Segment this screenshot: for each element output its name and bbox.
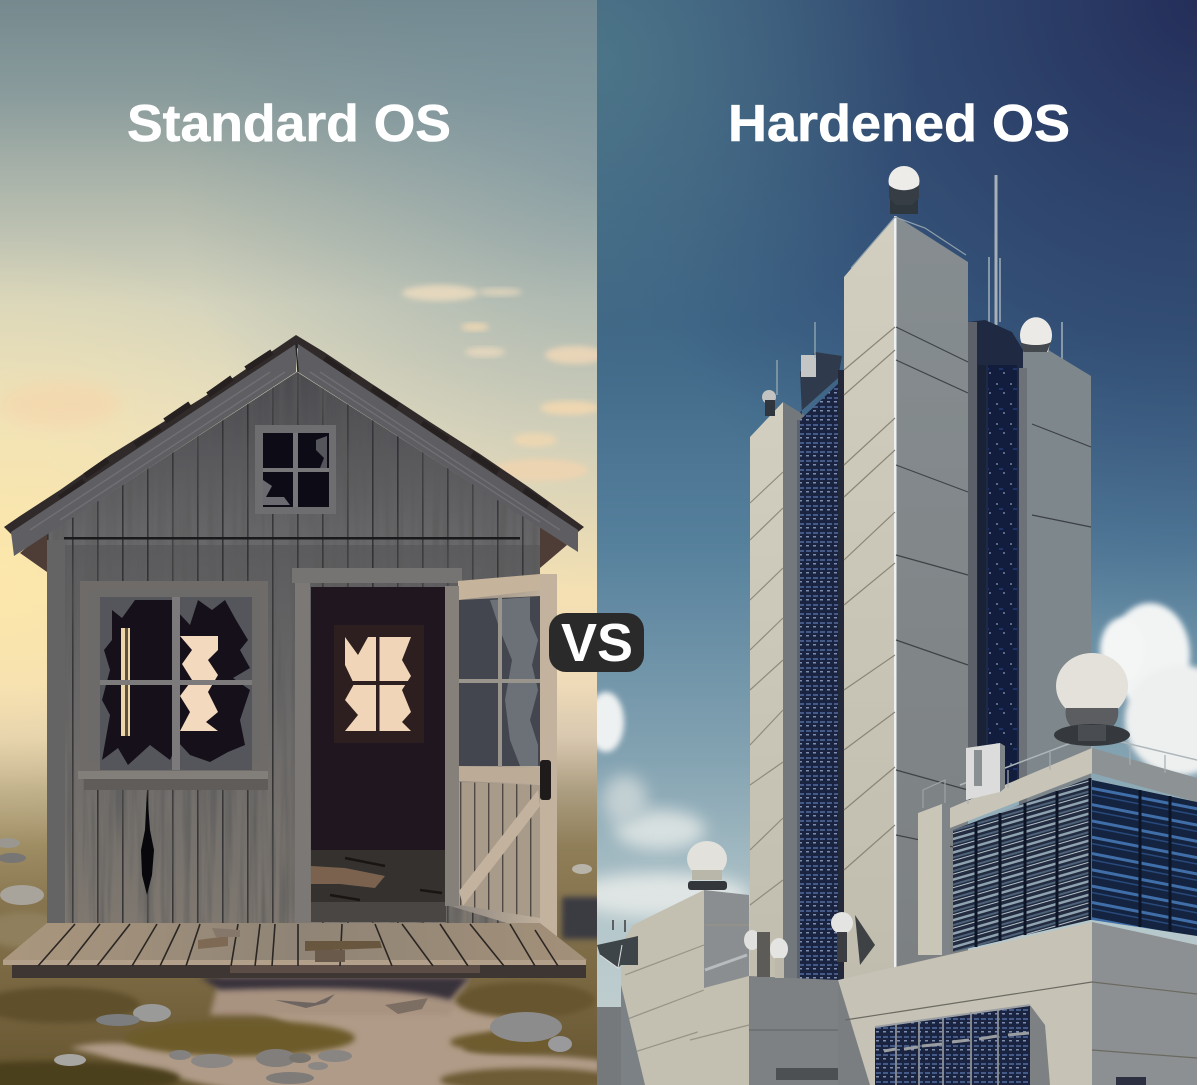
crack in wall: [141, 790, 154, 895]
porch base: [12, 965, 586, 978]
lower window bank: [875, 1005, 1030, 1085]
left low block: [597, 890, 749, 1085]
clouds: [570, 603, 1200, 917]
antenna mast: [989, 175, 1062, 360]
dark doorway: [311, 587, 446, 922]
wall: [47, 540, 540, 923]
eave shadows: [20, 525, 567, 572]
small dome: [762, 390, 776, 416]
roof shingles: [4, 335, 584, 535]
interior door window: [334, 625, 424, 743]
panel: standard OS scene: [0, 0, 620, 1085]
open door: [445, 574, 557, 938]
roof left fascia: [11, 344, 296, 556]
heading: Hardened OS: Hardened OS: [728, 95, 1070, 153]
louvre panel left face: [953, 778, 1090, 952]
main base block: [838, 922, 1197, 1085]
sky: dusk gradient: [0, 0, 605, 1085]
wood planks and grain: [47, 372, 540, 923]
main tower: [844, 216, 968, 990]
dome right tower: [1020, 317, 1052, 352]
large dome: [1054, 653, 1130, 746]
bracket platform: [597, 920, 638, 968]
heading: Standard OS: Standard OS: [127, 95, 451, 153]
white right margin: [1197, 0, 1200, 1085]
dark core: [968, 320, 1023, 800]
VS badge: VS: [561, 613, 633, 673]
left tower: [750, 360, 806, 1000]
roof right fascia: [298, 344, 578, 552]
porch deck with boards: [3, 923, 587, 966]
attic window: [255, 425, 336, 514]
left panel column: [797, 322, 844, 980]
rocks: [0, 838, 592, 1084]
broken left window: [78, 581, 268, 790]
wall shadow and small domes: [744, 912, 875, 978]
mid base block: [749, 976, 862, 1085]
lower right block: roof band: [950, 735, 1197, 828]
right tower: [1023, 348, 1091, 870]
dome on low block: [687, 841, 727, 890]
house: [3, 335, 587, 978]
louvre panel right face: [1092, 780, 1197, 936]
door trim: [292, 568, 462, 923]
top dome: [888, 166, 920, 214]
sky: deep blue gradient: [597, 0, 1200, 1085]
gable wall: [47, 372, 540, 545]
louvre mullions: [976, 778, 1170, 947]
panel: hardened OS scene: [570, 0, 1200, 1085]
small column: [918, 780, 950, 955]
ground: grass and dirt path: [0, 897, 620, 1085]
AC unit: [966, 743, 1005, 800]
